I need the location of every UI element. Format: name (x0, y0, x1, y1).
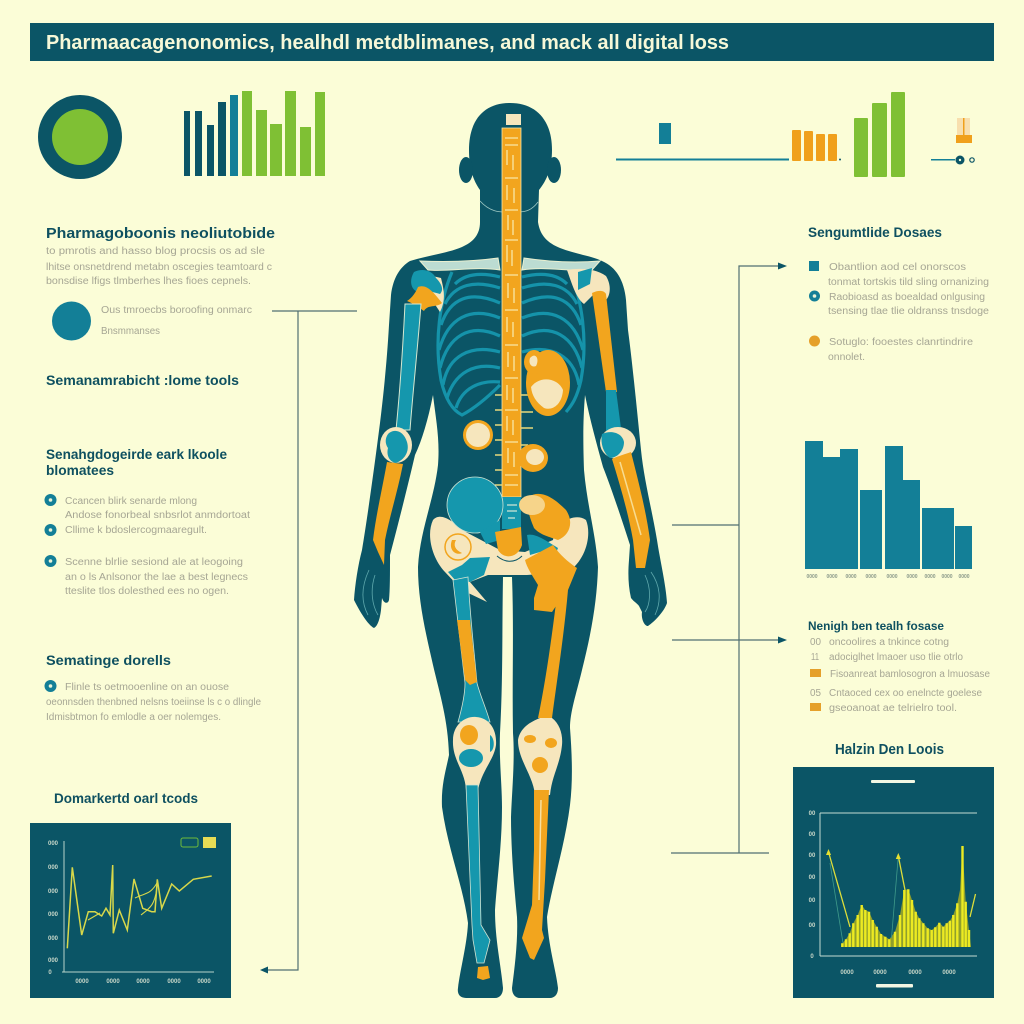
line chart panel: 000 (48, 958, 59, 964)
panel: dosage notes: Sengumtlide Dosaes (808, 224, 942, 240)
line chart panel: 0000 (106, 979, 120, 985)
right bar chart: 0000 (958, 574, 970, 580)
panel: health notes: 05 (810, 688, 821, 699)
line chart panel: 0000 (136, 979, 150, 985)
panel: dosage details: Idmisbtmon fo emlodle a oer nolemges. (46, 712, 221, 723)
panel: pharmacogenomics intro: Bnsmmanses (101, 326, 160, 337)
body silhouette (354, 103, 667, 998)
panel: dosage notes: tsensing tlae tlie oldranss tnsdoge (828, 306, 989, 317)
human body figure (354, 103, 667, 998)
right bar chart: 0000 (845, 574, 857, 580)
line chart panel: 000 (48, 912, 59, 918)
spike chart panel (793, 767, 994, 998)
left arm bones (373, 270, 444, 565)
organs (463, 350, 570, 472)
spike chart panel: 00 (809, 923, 816, 929)
icon: green donut (38, 95, 122, 179)
panel: health notes (808, 619, 990, 714)
panel: dosage notes: onnolet. (828, 352, 865, 363)
panel: dosage notes: Obantlion aod cel onorscos (829, 262, 966, 273)
line chart panel: 000 (48, 865, 59, 871)
line chart panel: 0000 (167, 979, 181, 985)
pelvis (430, 477, 588, 612)
right leg bones (518, 590, 568, 960)
top right bar chart strip (616, 92, 974, 177)
panel: dosage notes: Sotuglo: fooestes clanrtindrire (829, 337, 973, 348)
panel: biomarkers list (44, 446, 250, 597)
panel: dosage notes: tonmat tortskis tild sling ornanizing (828, 277, 989, 288)
spike chart panel: 00 (809, 853, 816, 859)
finger lines (363, 570, 659, 615)
panel: health notes: Cntaoced cex oo enelncte goelese (829, 688, 982, 699)
panel: dosage notes: Raobioasd as boealdad onlgusing (829, 292, 985, 303)
neck line (480, 201, 538, 212)
ears (459, 157, 561, 183)
title banner: Pharmaacagenonomics, healhdl metdblimanes, and mack all digital loss (46, 32, 729, 54)
heading: left chart: Domarkertd oarl tcods (54, 791, 198, 806)
panel: biomarkers list: an o ls Anlsonor the lae a best legnecs (65, 572, 248, 583)
left leg bones (453, 577, 496, 980)
right bar chart: 0000 (865, 574, 877, 580)
spike chart panel: 0000 (908, 970, 922, 976)
right bar chart: 0000 (924, 574, 936, 580)
right bar chart: 0000 (941, 574, 953, 580)
panel: pharmacogenomics intro: bonsdise lfigs tlmberhes lhes fioes cepnels. (46, 276, 251, 287)
panel: dosage details (44, 652, 261, 723)
title banner (30, 23, 994, 61)
panel: biomarkers list: Senahgdogeirde eark lkoole (46, 446, 227, 462)
ribcage (438, 272, 584, 415)
spike chart panel: 00 (809, 898, 816, 904)
clavicles (420, 258, 600, 270)
panel: pharmacogenomics intro: to pmrotis and hasso blog procsis os ad sle (46, 246, 265, 257)
top left bar chart (184, 91, 325, 176)
panel: pharmacogenomics intro (46, 226, 275, 340)
line chart panel (30, 823, 231, 998)
right bar chart: 0000 (886, 574, 898, 580)
panel: biomarkers list: Andose fonorbeal snbsrlot anmdortoat (65, 510, 250, 521)
panel: biomarkers list: Cllime k bdoslercogmaaregult. (65, 525, 207, 536)
panel: pharmacogenomics intro: Ous tmroecbs boroofing onmarc (101, 305, 252, 316)
right bar chart: 0000 (906, 574, 918, 580)
line chart panel: 000 (48, 936, 59, 942)
line chart panel: 0000 (197, 979, 211, 985)
panel: dosage details: Flinle ts oetmooenline on an ouose (65, 682, 229, 693)
panel: dosage notes (808, 224, 989, 363)
panel: dosage details: Sematinge dorells (46, 652, 171, 668)
heading: right chart: Halzin Den Loois (835, 741, 944, 758)
spike chart panel: 0000 (840, 970, 854, 976)
connector lines and arrows (260, 262, 787, 974)
panel: dosage details: oeonnsden thenbned nelsns toeiinse ls c o dlingle (46, 697, 261, 708)
panel: biomarkers list: Ccancen blirk senarde mlong (65, 496, 197, 507)
heading: tools: Semanamrabicht :lome tools (46, 372, 239, 388)
line chart panel: 000 (48, 841, 59, 847)
line chart panel: 0000 (75, 979, 89, 985)
panel: biomarkers list: tteslite tlos dolesthed ees no ogen. (65, 586, 229, 597)
panel: pharmacogenomics intro: Pharmagoboonis neoliutobide (46, 226, 275, 242)
panel: biomarkers list: Scenne blrlie sesiond ale at leogoing (65, 557, 243, 568)
right bar chart: 0000 (826, 574, 838, 580)
spike chart panel: 0 (810, 954, 814, 960)
panel: health notes: oncoolires a tnkince cotng (829, 637, 949, 648)
panel: health notes: 11 (811, 652, 819, 663)
line chart panel: 000 (48, 889, 59, 895)
line chart panel: 0 (48, 970, 52, 976)
spike chart panel: 0000 (873, 970, 887, 976)
panel: health notes: Fisoanreat bamlosogron a lmuosase (830, 669, 990, 680)
spike chart panel: 00 (809, 875, 816, 881)
panel: health notes: 00 (810, 637, 821, 648)
panel: health notes: gseoanoat ae telrielro tool. (829, 703, 957, 714)
spike chart panel: 00 (809, 811, 816, 817)
spike chart panel: 00 (809, 832, 816, 838)
spine (495, 114, 533, 529)
spike chart panel: 0000 (942, 970, 956, 976)
right bar chart (805, 441, 972, 580)
right bar chart: 0000 (806, 574, 818, 580)
panel: pharmacogenomics intro: lhitse onsnetdrend metabn oscegies teamtoard c (46, 262, 272, 273)
panel: biomarkers list: blomatees (46, 462, 114, 478)
panel: health notes: adociglhet lmaoer uso tlie otrlo (829, 652, 963, 663)
right arm bones (567, 268, 650, 568)
panel: health notes: Nenigh ben tealh fosase (808, 619, 944, 633)
